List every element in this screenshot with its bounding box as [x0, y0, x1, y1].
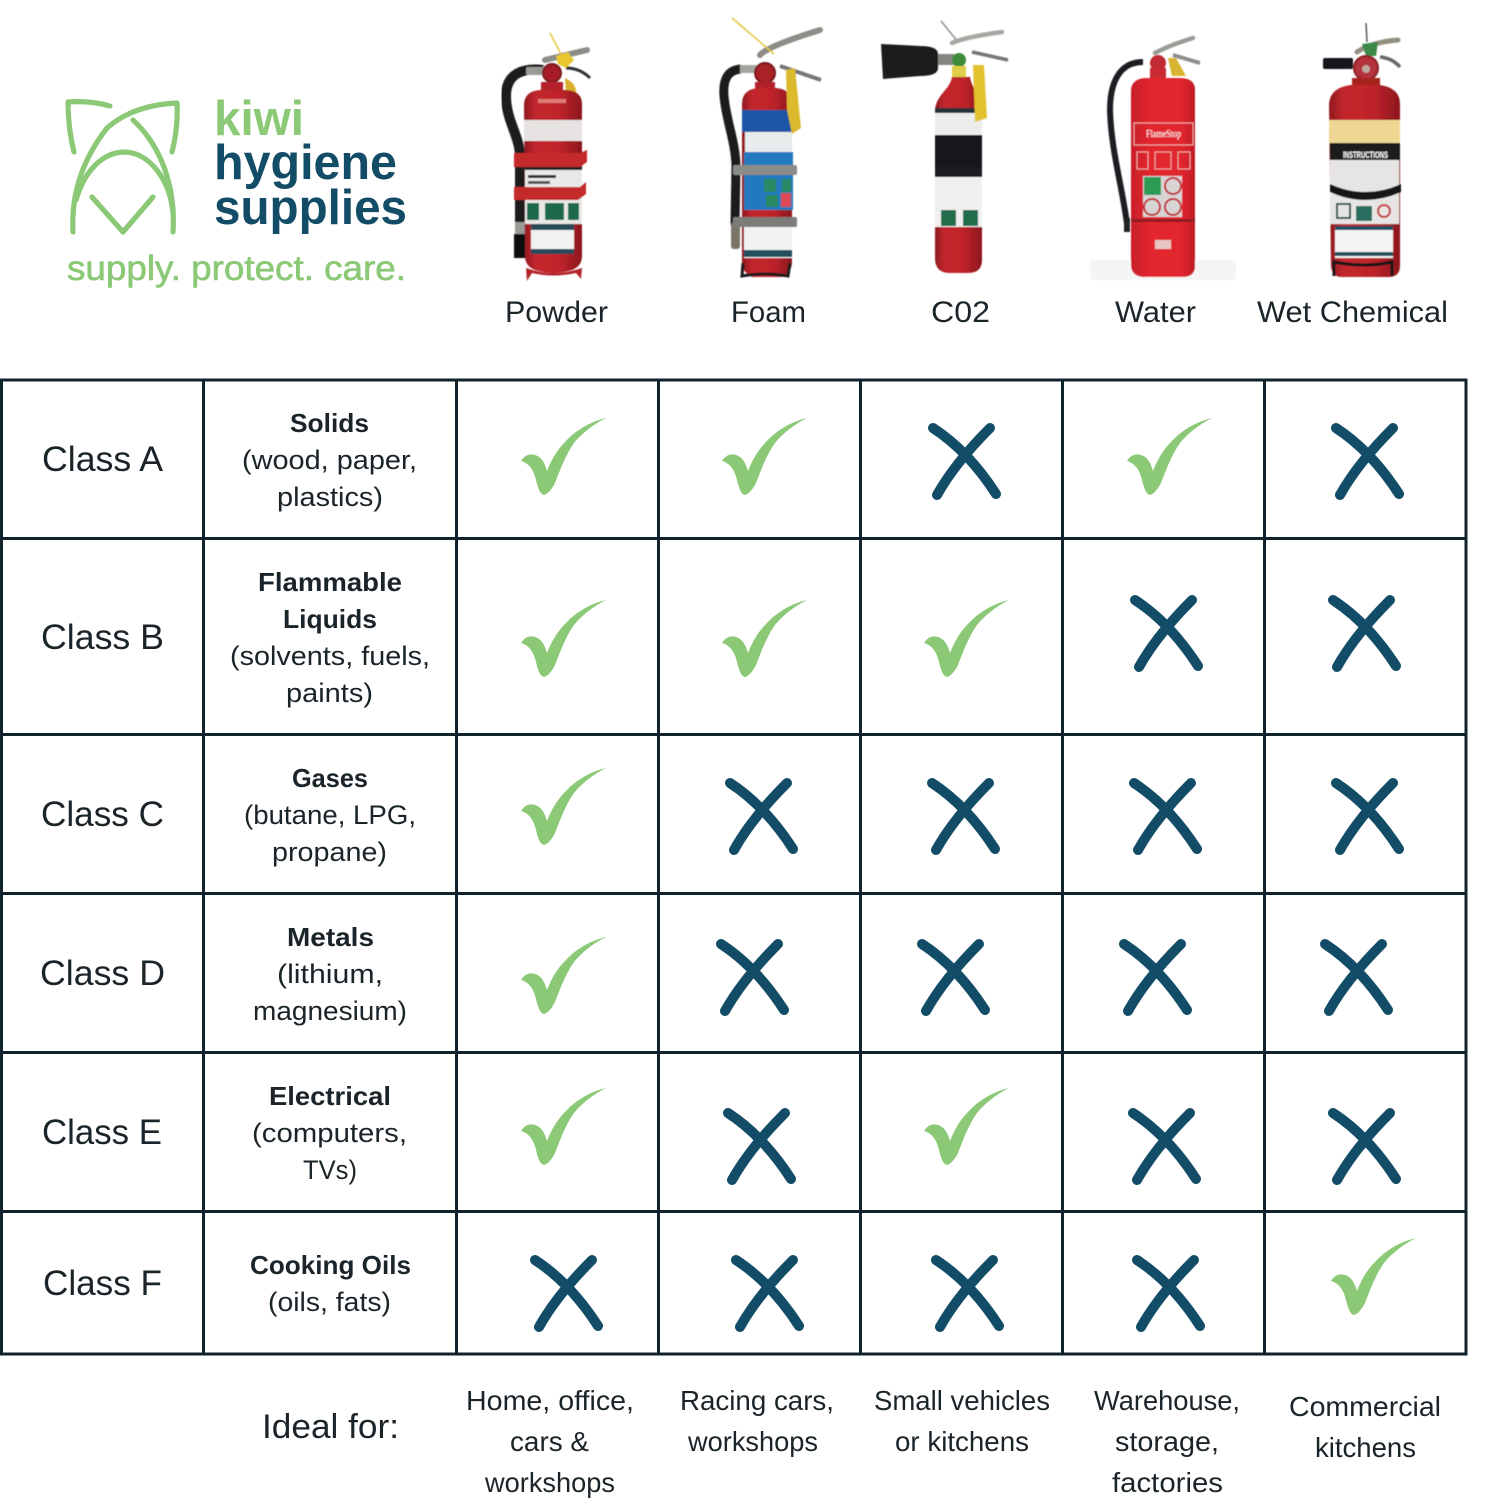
- CO2: no: [936, 1260, 999, 1327]
- logo: [67, 92, 407, 288]
- extinguisher labels: C02: [931, 296, 990, 329]
- fire type: gases: [244, 763, 416, 867]
- powder: yes: [521, 418, 606, 495]
- fire type: gases: propane): [272, 837, 387, 867]
- ideal for heading: Ideal for:: [262, 1408, 399, 1446]
- logo wordmark: [214, 92, 407, 235]
- powder uses: [466, 1385, 634, 1498]
- class label B: Class B: [41, 618, 164, 657]
- water uses: storage,: [1115, 1426, 1219, 1457]
- fire type: electrical: TVs): [303, 1155, 357, 1185]
- fire type: electrical: [252, 1081, 407, 1185]
- CO2 uses: [874, 1385, 1050, 1457]
- fire type: metals: (lithium,: [277, 959, 383, 989]
- water uses: Warehouse,: [1094, 1385, 1240, 1416]
- row: class B: [41, 567, 1396, 708]
- water: yes: [1127, 418, 1212, 495]
- foam uses: Racing cars,: [680, 1385, 834, 1416]
- row: class C: [41, 763, 1399, 867]
- foam: no: [736, 1260, 799, 1327]
- class label F: Class F: [43, 1264, 162, 1303]
- CO2: no: [933, 428, 996, 495]
- water: no: [1135, 600, 1198, 667]
- fire type: flammable liquids: (solvents, fuels,: [230, 641, 430, 671]
- fire type: metals: Metals: [287, 922, 374, 952]
- fire type: gases: (butane, LPG,: [244, 800, 416, 830]
- wet chemical: no: [1336, 783, 1399, 850]
- ideal for row: [262, 1385, 1441, 1498]
- fire type: electrical: Electrical: [269, 1081, 391, 1111]
- extinguisher: powder: [506, 33, 590, 281]
- fire type: solids: Solids: [290, 408, 369, 438]
- logo wordmark: supplies: [214, 181, 407, 235]
- extinguisher labels: Foam: [731, 296, 806, 329]
- wet chemical: yes: [1331, 1238, 1416, 1315]
- extinguisher: foam: [724, 18, 821, 277]
- powder uses: workshops: [484, 1467, 615, 1498]
- fire type: solids: (wood, paper,: [242, 445, 417, 475]
- wet chemical: no: [1333, 1113, 1396, 1180]
- CO2 uses: Small vehicles: [874, 1385, 1050, 1416]
- fire type: metals: magnesium): [253, 996, 407, 1026]
- fire type: solids: [242, 408, 417, 512]
- water: no: [1137, 1260, 1200, 1327]
- row: class F: [43, 1238, 1416, 1327]
- foam uses: [680, 1385, 834, 1457]
- extinguisher: water: [1090, 38, 1236, 280]
- extinguisher labels: Wet Chemical: [1257, 296, 1448, 329]
- fire type: flammable liquids: [230, 567, 430, 708]
- water uses: factories: [1112, 1467, 1223, 1498]
- class label D: Class D: [40, 954, 165, 993]
- wet chemical: no: [1333, 600, 1396, 667]
- extinguisher: wet chemical: [1323, 23, 1401, 277]
- logo wordmark: kiwi: [214, 92, 304, 146]
- fire type: solids: plastics): [277, 482, 383, 512]
- CO2: no: [922, 944, 985, 1011]
- extinguisher labels: Water: [1115, 296, 1196, 329]
- class label A: Class A: [42, 440, 164, 479]
- fire type: cooking oils: [250, 1250, 411, 1317]
- wet chemical: no: [1325, 944, 1388, 1011]
- fire type: metals: [253, 922, 407, 1026]
- wet chemical: no: [1336, 428, 1399, 495]
- CO2 uses: or kitchens: [895, 1426, 1029, 1457]
- extinguisher: water: FlameStop: [1146, 129, 1181, 140]
- water: no: [1124, 944, 1187, 1011]
- CO2: no: [932, 783, 995, 850]
- wet chemical uses: [1289, 1391, 1441, 1463]
- foam: no: [721, 944, 784, 1011]
- water: no: [1133, 1113, 1196, 1180]
- fire type: electrical: (computers,: [252, 1118, 407, 1148]
- foam: no: [730, 783, 793, 850]
- row: class D: [40, 922, 1388, 1026]
- foam uses: workshops: [687, 1426, 818, 1457]
- wet chemical uses: Commercial: [1289, 1391, 1441, 1422]
- CO2: yes: [924, 1088, 1009, 1165]
- fire type: cooking oils: (oils, fats): [268, 1287, 391, 1317]
- powder uses: Home, office,: [466, 1385, 634, 1416]
- fire type: flammable liquids: Flammable: [258, 567, 402, 597]
- fire type: flammable liquids: Liquids: [283, 604, 377, 634]
- extinguisher labels: [505, 296, 1448, 329]
- water uses: [1094, 1385, 1240, 1498]
- powder: yes: [521, 937, 606, 1014]
- wet chemical uses: kitchens: [1315, 1432, 1416, 1463]
- row: class E: [42, 1081, 1396, 1185]
- fire type: gases: Gases: [292, 763, 368, 793]
- class label C: Class C: [41, 795, 164, 834]
- foam: no: [728, 1113, 791, 1180]
- powder: no: [535, 1260, 598, 1327]
- fire type: cooking oils: Cooking Oils: [250, 1250, 411, 1280]
- foam: yes: [722, 418, 807, 495]
- water: no: [1134, 783, 1197, 850]
- extinguisher: CO2: [881, 21, 1008, 273]
- powder uses: cars &: [510, 1426, 589, 1457]
- fire type: flammable liquids: paints): [286, 678, 373, 708]
- class label E: Class E: [42, 1113, 162, 1152]
- logo wordmark: hygiene: [214, 136, 397, 190]
- CO2: yes: [924, 600, 1009, 677]
- extinguisher labels: Powder: [505, 296, 608, 329]
- powder: yes: [521, 768, 606, 845]
- logo tagline: supply. protect. care.: [67, 249, 406, 288]
- extinguisher: wet chemical: INSTRUCTIONS: [1343, 150, 1388, 160]
- icon: kiwi hygiene emblem: [68, 102, 177, 232]
- powder: yes: [521, 1088, 606, 1165]
- powder: yes: [521, 600, 606, 677]
- row: class A: [42, 408, 1399, 512]
- table grid: [2, 380, 1466, 1354]
- foam: yes: [722, 600, 807, 677]
